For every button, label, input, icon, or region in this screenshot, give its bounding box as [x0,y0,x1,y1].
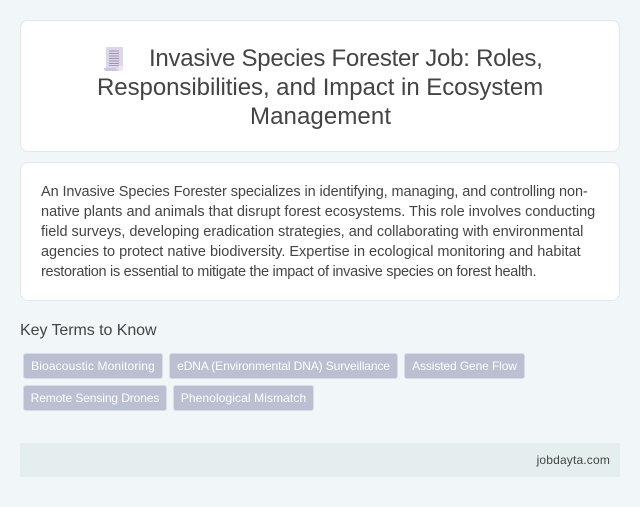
heading: key terms: Key Terms to Know [20,322,157,339]
text block: description: native plants and animals that disrupt forest ecosystems. This role involves conducting [41,204,595,220]
title: Invasive Species Forester Job: Roles, [149,45,543,72]
tag: remote sensing drones: Remote Sensing Drones [31,391,159,405]
panel: title card [20,20,620,152]
tag: phenological mismatch: Phenological Mismatch [181,391,306,405]
tag: phenological mismatch [173,385,314,411]
text block: description [41,184,595,280]
text block: description: agencies to protect native biodiversity. Expertise in ecological monitoring and habitat [41,244,581,260]
icon: document scroll [104,47,123,71]
footer bar [20,443,620,477]
tag: eDNA surveillance: eDNA (Environmental DNA) Surveillance [177,359,390,373]
title: Responsibilities, and Impact in Ecosystem [97,74,543,101]
tags: key terms [23,353,525,411]
text block: description: restoration is essential to mitigate the impact of invasive species on forest health. [41,264,536,280]
text block: description: An Invasive Species Forester specializes in identifying, managing, and controlling non- [41,184,588,200]
tag: assisted gene flow: Assisted Gene Flow [412,359,517,373]
title [97,45,543,130]
tag: bioacoustic monitoring: Bioacoustic Monitoring [31,359,155,373]
tag: remote sensing drones [23,385,167,411]
footer source text: jobdayta.com [537,453,610,467]
text block: description: field surveys, developing eradication strategies, and collaborating with environmental [41,224,583,240]
title: Management [250,103,391,130]
panel: description card [20,162,620,301]
tag: bioacoustic monitoring [23,353,163,379]
tag: assisted gene flow [404,353,525,379]
tag: eDNA surveillance [169,353,398,379]
